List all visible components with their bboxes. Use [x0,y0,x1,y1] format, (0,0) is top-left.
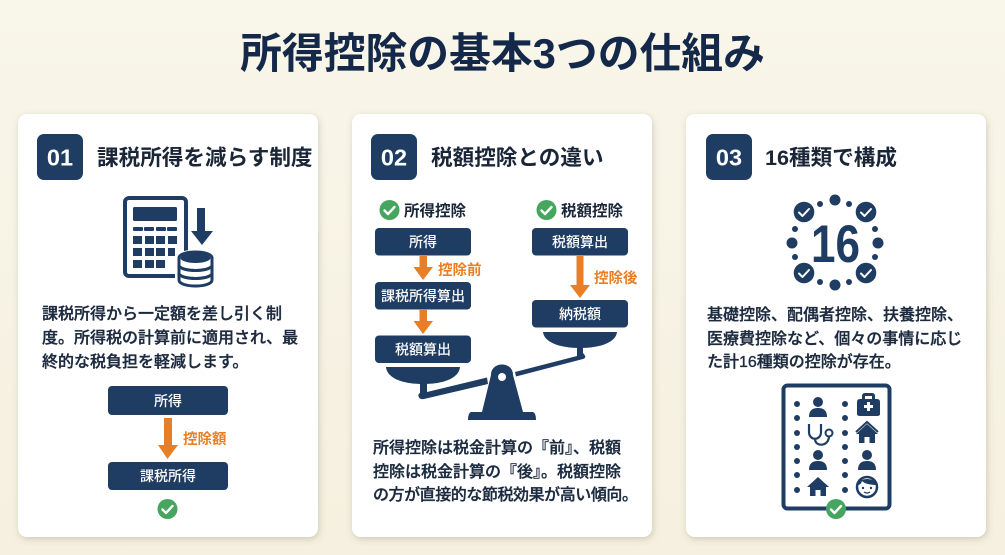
body text 02: 所得控除は税金計算の『前』、税額 [373,438,621,457]
flow: 税額控除: 納税額 [559,306,601,322]
icon: 16 ring of checks: 16 [811,215,860,274]
flow: 所得 to 課税所得: 控除額 [183,430,227,448]
flow: 所得控除: 課税所得算出 [381,288,465,304]
heading 03: 16種類で構成 [765,145,897,170]
icon: 16 ring of checks [786,194,884,290]
flow: 所得控除: 所得 [409,234,437,250]
flow: 所得控除: 税額算出 [395,342,451,358]
flow: 税額控除: 控除後 [594,269,638,287]
number badge 01: 01 [47,144,73,170]
body text 03: 基礎控除、配偶者控除、扶養控除、 [707,306,963,324]
body text 03 [707,306,963,371]
body text 02 [373,438,638,504]
body text 02: の方が直接的な節税効果が高い傾向。 [373,485,638,504]
flow: 所得控除 [375,228,482,363]
body text 03: 医療費控除など、個々の事情に応じ [707,330,962,348]
icon: checklist of deductions [784,386,890,508]
flow: 税額控除: 税額算出 [552,234,608,250]
icon: calculator with coins [125,198,215,288]
icon: green check [158,499,178,519]
flow: 所得 to 課税所得: 課税所得 [140,468,196,484]
flow: 所得 to 課税所得 [108,386,228,490]
body text 02: 控除は税金計算の『後』。税額控除 [373,462,621,481]
column label: 税額控除: 税額控除 [561,202,624,220]
flow: 所得控除: 控除前 [438,261,482,279]
column label: 所得控除 [380,200,467,220]
body text 01 [42,305,298,371]
number badge 01 [37,134,83,180]
body text 01: 課税所得から一定額を差し引く制 [42,305,282,323]
heading 02: 税額控除との違い [431,145,604,170]
heading 01: 課税所得を減らす制度 [97,145,313,170]
number badge 02: 02 [381,144,407,170]
number badge 03 [706,134,752,180]
body text 01: 終的な税負担を軽減します。 [42,353,248,371]
panel: 01 課税所得を減らす制度 [18,114,318,537]
column label: 税額控除 [536,200,624,220]
body text 01: 度。所得税の計算前に適用され、最 [42,328,298,347]
title: 所得控除の基本3つの仕組み [240,30,765,77]
panel: 03 16種類で構成 [686,114,986,537]
flow: 税額控除 [532,228,638,328]
number badge 02 [371,134,417,180]
number badge 03: 03 [716,144,742,170]
body text 03: た計16種類の控除が存在。 [707,352,901,371]
panel: 02 税額控除との違い [352,114,652,537]
icon: balance scale [386,332,617,420]
flow: 所得 to 課税所得: 所得 [154,393,182,409]
icon: green check on checklist [826,499,846,519]
column label: 所得控除: 所得控除 [404,202,467,220]
